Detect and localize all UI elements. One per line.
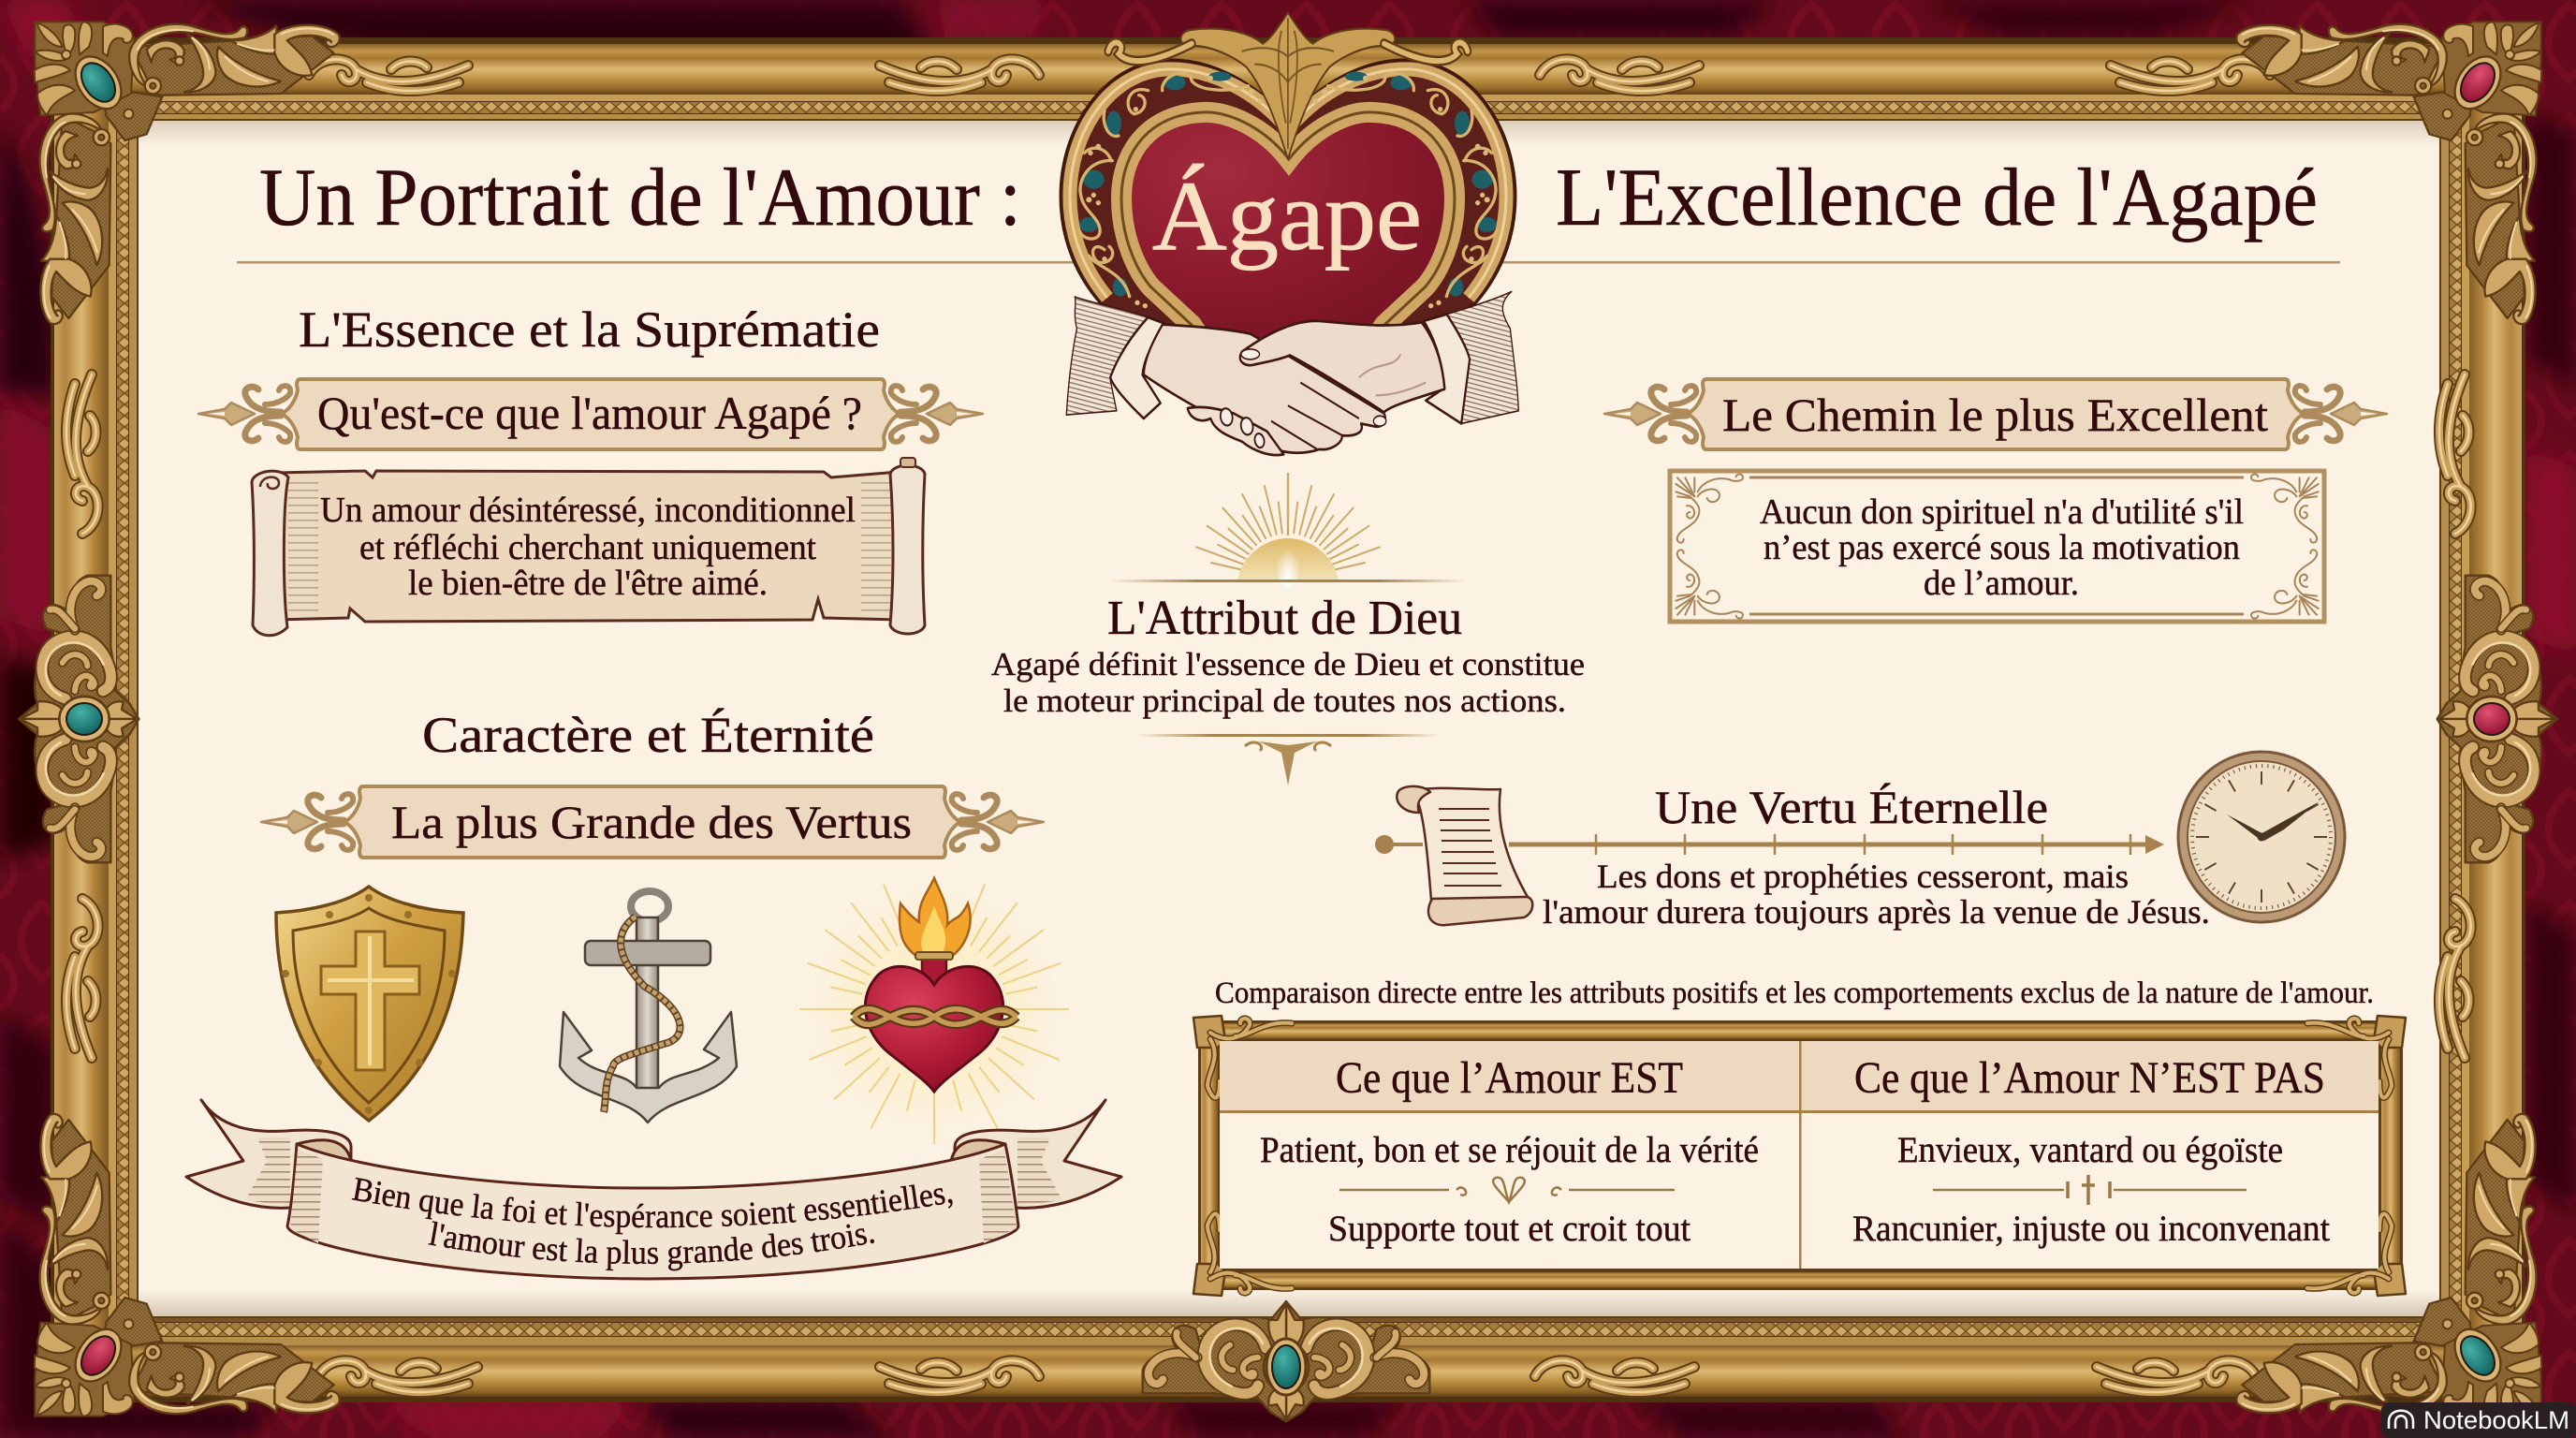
ornamental divider (1135, 734, 1441, 785)
left sleeve (1066, 297, 1148, 415)
heart ornate band: right (1313, 72, 1497, 308)
timeline arrow (1375, 834, 2164, 855)
right cuff (1424, 315, 1470, 423)
NotebookLM watermark (2381, 1402, 2576, 1438)
table gold frame (1193, 1016, 2406, 1296)
icon: anchor with rope (560, 891, 737, 1123)
NotebookLM watermark: NotebookLM (2423, 1406, 2569, 1434)
table header row (1220, 1041, 2378, 1111)
banner: what is agape (198, 379, 983, 449)
side ornament: right with ruby gem (2437, 576, 2557, 862)
left row divider (1339, 1178, 1675, 1202)
heart word: Ágape (1152, 161, 1422, 271)
title: left: Un Portrait de l'Amour : (259, 153, 1021, 243)
parchment panel (138, 120, 2440, 1317)
ribbon banner: faith and hope: l'amour est la plus grande des trois. (429, 1221, 874, 1271)
banner: most excellent way (1604, 379, 2387, 449)
heart ornate band: left (1079, 72, 1263, 308)
ribbon banner: faith and hope (184, 1098, 1123, 1281)
left cuff (1110, 317, 1164, 418)
comparison caption: Comparaison directe entre les attributs positifs et les comportements exclus de la nature de l'amour. (1215, 976, 2374, 1010)
central emblem: heart medallion with handshake (1061, 13, 1518, 455)
right hand (1240, 321, 1444, 412)
table row one: Patient, bon et se réjouit de la vérité (1260, 1130, 1759, 1170)
table row two: Supporte tout et croit tout (1328, 1209, 1690, 1249)
crest above the heart (1108, 13, 1468, 159)
heading: eternal virtue: Une Vertu Éternelle (1655, 781, 2048, 833)
comparison table: Rancunier, injuste ou inconvenant (1852, 1209, 2330, 1249)
icon: paper scroll (1397, 786, 1532, 925)
banner: most excellent way: Le Chemin le plus Excellent (1722, 389, 2268, 441)
text: attribute of God: le moteur principal de toutes nos actions. (1003, 682, 1566, 719)
comparison table: Envieux, vantard ou égoïste (1897, 1130, 2283, 1170)
text: eternal virtue: Les dons et prophéties cesseront, mais (1597, 858, 2129, 895)
ribbon centre band (287, 1144, 1018, 1279)
handshake (1066, 292, 1518, 455)
scroll panel: definition (252, 458, 925, 636)
comparison table: Ce que l’Amour EST (1336, 1053, 1683, 1103)
icon: antique clock (2178, 752, 2345, 922)
text: eternal virtue (1543, 858, 2210, 931)
scroll panel: definition: et réfléchi cherchant uniquement (359, 528, 816, 567)
text box: spiritual gifts: Aucun don spirituel n'a d'utilité s'il (1760, 492, 2244, 532)
ribbon banner: faith and hope: Bien que la foi et l'espérance soient essentielles, (352, 1178, 953, 1234)
banner: what is agape: Qu'est-ce que l'amour Agapé ? (317, 387, 862, 439)
right row divider (1933, 1175, 2247, 1205)
bottom ornament with teal gem (1143, 1301, 1429, 1421)
curled fingers (1188, 407, 1283, 455)
banner: greatest virtue (261, 786, 1044, 858)
scroll panel: definition: Un amour désintéressé, inconditionnel (320, 491, 856, 530)
text box: spiritual gifts: n’est pas exercé sous la motivation (1764, 528, 2240, 567)
title: right: L'Excellence de l'Agapé (1556, 153, 2318, 243)
heart outer frame (1061, 60, 1515, 374)
scroll panel: definition: le bien-être de l'être aimé. (408, 564, 768, 603)
right roller (890, 465, 925, 634)
section heading: essence: L'Essence et la Suprématie (299, 301, 880, 358)
comparison table (1193, 1016, 2406, 1296)
left roller (252, 471, 288, 636)
red heart (1121, 112, 1455, 348)
text: attribute of God: Agapé définit l'essence de Dieu et constitue (991, 646, 1585, 682)
sunburst: attribute of God (1108, 473, 1468, 588)
section heading: character: Caractère et Éternité (422, 707, 874, 763)
side ornament: left with teal gem (19, 576, 139, 862)
corner ornament: bottom right with teal gem (2236, 1114, 2541, 1416)
corner ornament: bottom left with ruby gem (35, 1114, 340, 1416)
text box: spiritual gifts (1670, 471, 2324, 622)
corner ornament: top right with ruby gem (2236, 22, 2541, 324)
corner ornament: top left with teal gem (35, 22, 340, 324)
text: attribute of God (991, 646, 1585, 719)
left hand (1144, 325, 1385, 453)
text box: spiritual gifts: de l’amour. (1924, 564, 2079, 603)
heading: attribute of God: L'Attribut de Dieu (1107, 592, 1462, 645)
icon: sacred heart with flames and thorns (780, 859, 1089, 1159)
comparison table: Ce que l’Amour N’EST PAS (1854, 1053, 2325, 1103)
text: eternal virtue: l'amour durera toujours après la venue de Jésus. (1543, 893, 2210, 931)
icon: golden shield with cross (276, 887, 463, 1121)
banner: greatest virtue: La plus Grande des Vertus (391, 796, 912, 848)
right sleeve (1447, 292, 1518, 423)
title rule (237, 261, 2340, 264)
